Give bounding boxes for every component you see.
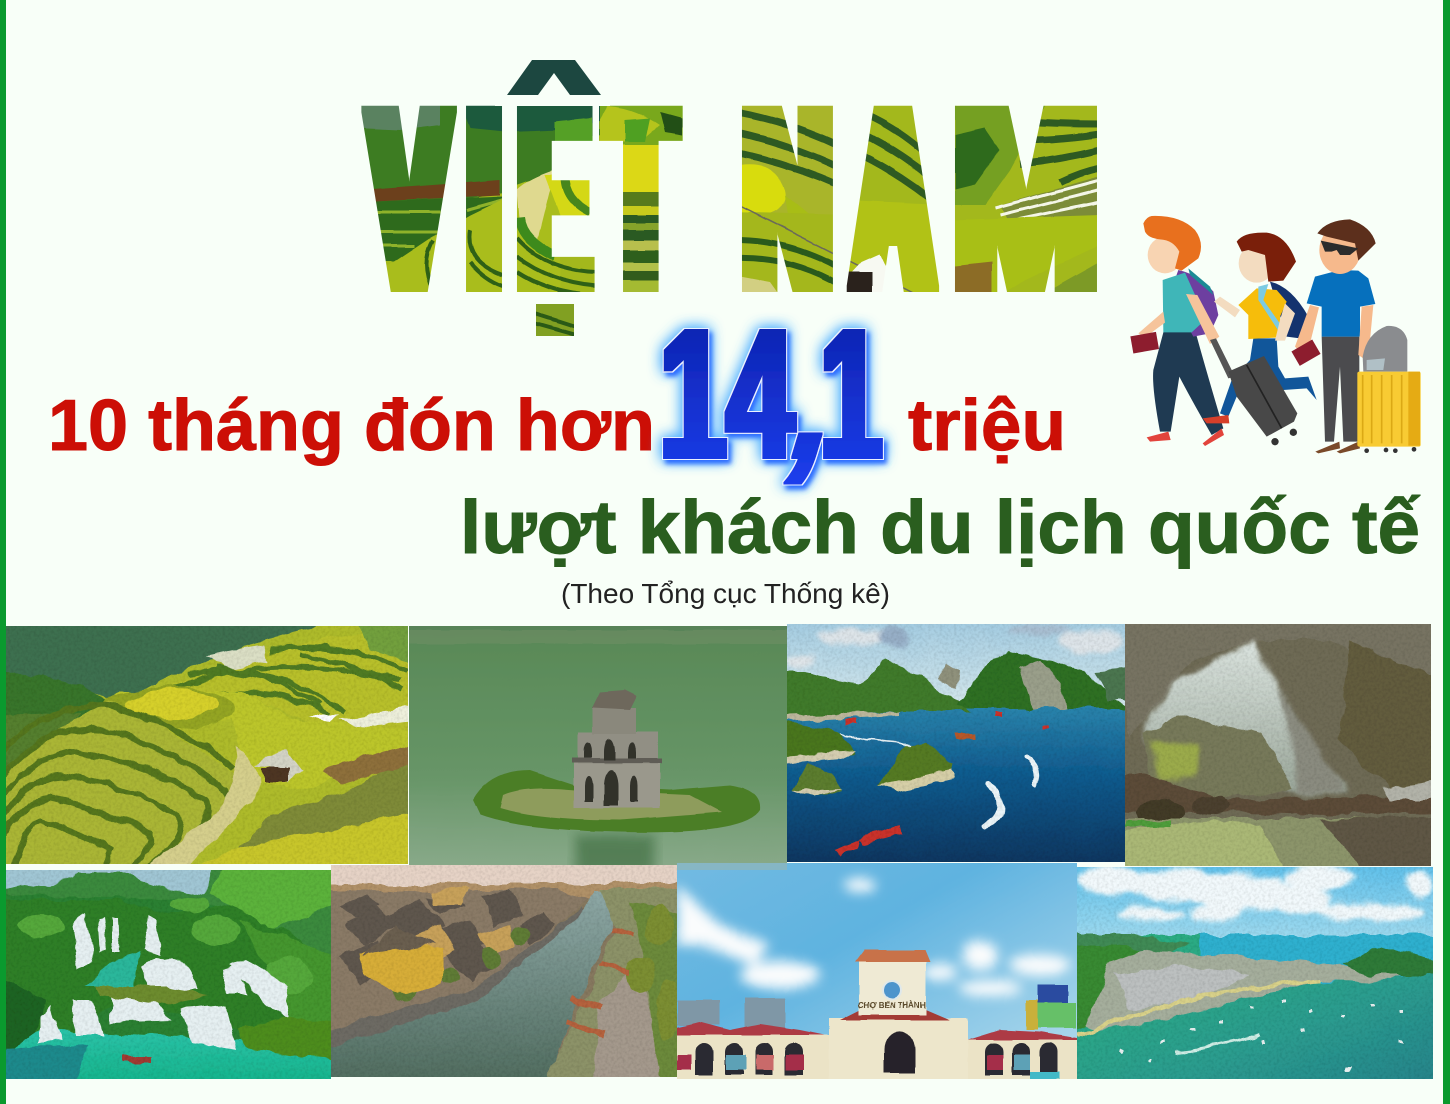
photo: Son Doong cave (1125, 624, 1431, 866)
red boats (833, 712, 1048, 855)
headline number 14,1 in glowing blue: , (776, 309, 864, 494)
photo: Phu Quoc bay (1077, 867, 1433, 1079)
hut on the terrace (256, 747, 302, 783)
boat wakes (840, 735, 1039, 825)
photo: Ha Long Bay (787, 624, 1125, 862)
headline number 14,1 in glowing blue: 14 (659, 291, 794, 498)
main entrance block (828, 1018, 968, 1079)
market right wing (968, 1040, 1077, 1079)
island (473, 770, 760, 832)
sandy beach (1077, 980, 1320, 1037)
tower (572, 690, 662, 808)
town on shore (1085, 950, 1400, 1030)
anchored boats (1120, 1000, 1404, 1073)
headline number 14,1 in glowing blue: 1 (820, 289, 882, 498)
yellow houses (359, 945, 442, 995)
faded overlap of market sky on the lake photo (677, 863, 787, 870)
market left wing (677, 1034, 829, 1079)
moored boats (565, 927, 632, 1038)
traveller 2: boy with yellow shirt and rolling suitcase (1203, 233, 1317, 445)
cascading falls (40, 915, 290, 1050)
photo: Hoi An riverside (331, 865, 677, 1077)
right green border (1443, 0, 1450, 1104)
traveller 1: red-haired walker (1130, 216, 1224, 446)
market sign: CHỢ BẾN THÀNH (858, 1000, 926, 1010)
billboard (1026, 985, 1076, 1030)
headline line 1 in red: 10 tháng đón hơn (48, 386, 655, 466)
tourist boat (123, 1056, 151, 1063)
title: VIỆT NAM filled with rice terrace photo (361, 60, 1097, 336)
photo: Ben Thanh market (677, 863, 1077, 1079)
photo: Hoan Kiem lake and Turtle Tower (409, 626, 787, 865)
illustration: three travellers with luggage (1130, 216, 1421, 453)
headline word: triệu: triệu (908, 386, 1066, 466)
left green border (0, 0, 6, 1104)
source note: (Theo Tổng cục Thống kê) (561, 578, 890, 609)
headline number 14,1 in glowing blue (659, 289, 882, 498)
headline line 2 in green: lượt khách du lịch quốc tế (460, 485, 1420, 569)
traveller 3: man in sunglasses with bags (1291, 219, 1421, 453)
photo: Mu Cang Chai rice terraces (6, 626, 408, 864)
photo: Ban Gioc waterfall (6, 870, 331, 1079)
